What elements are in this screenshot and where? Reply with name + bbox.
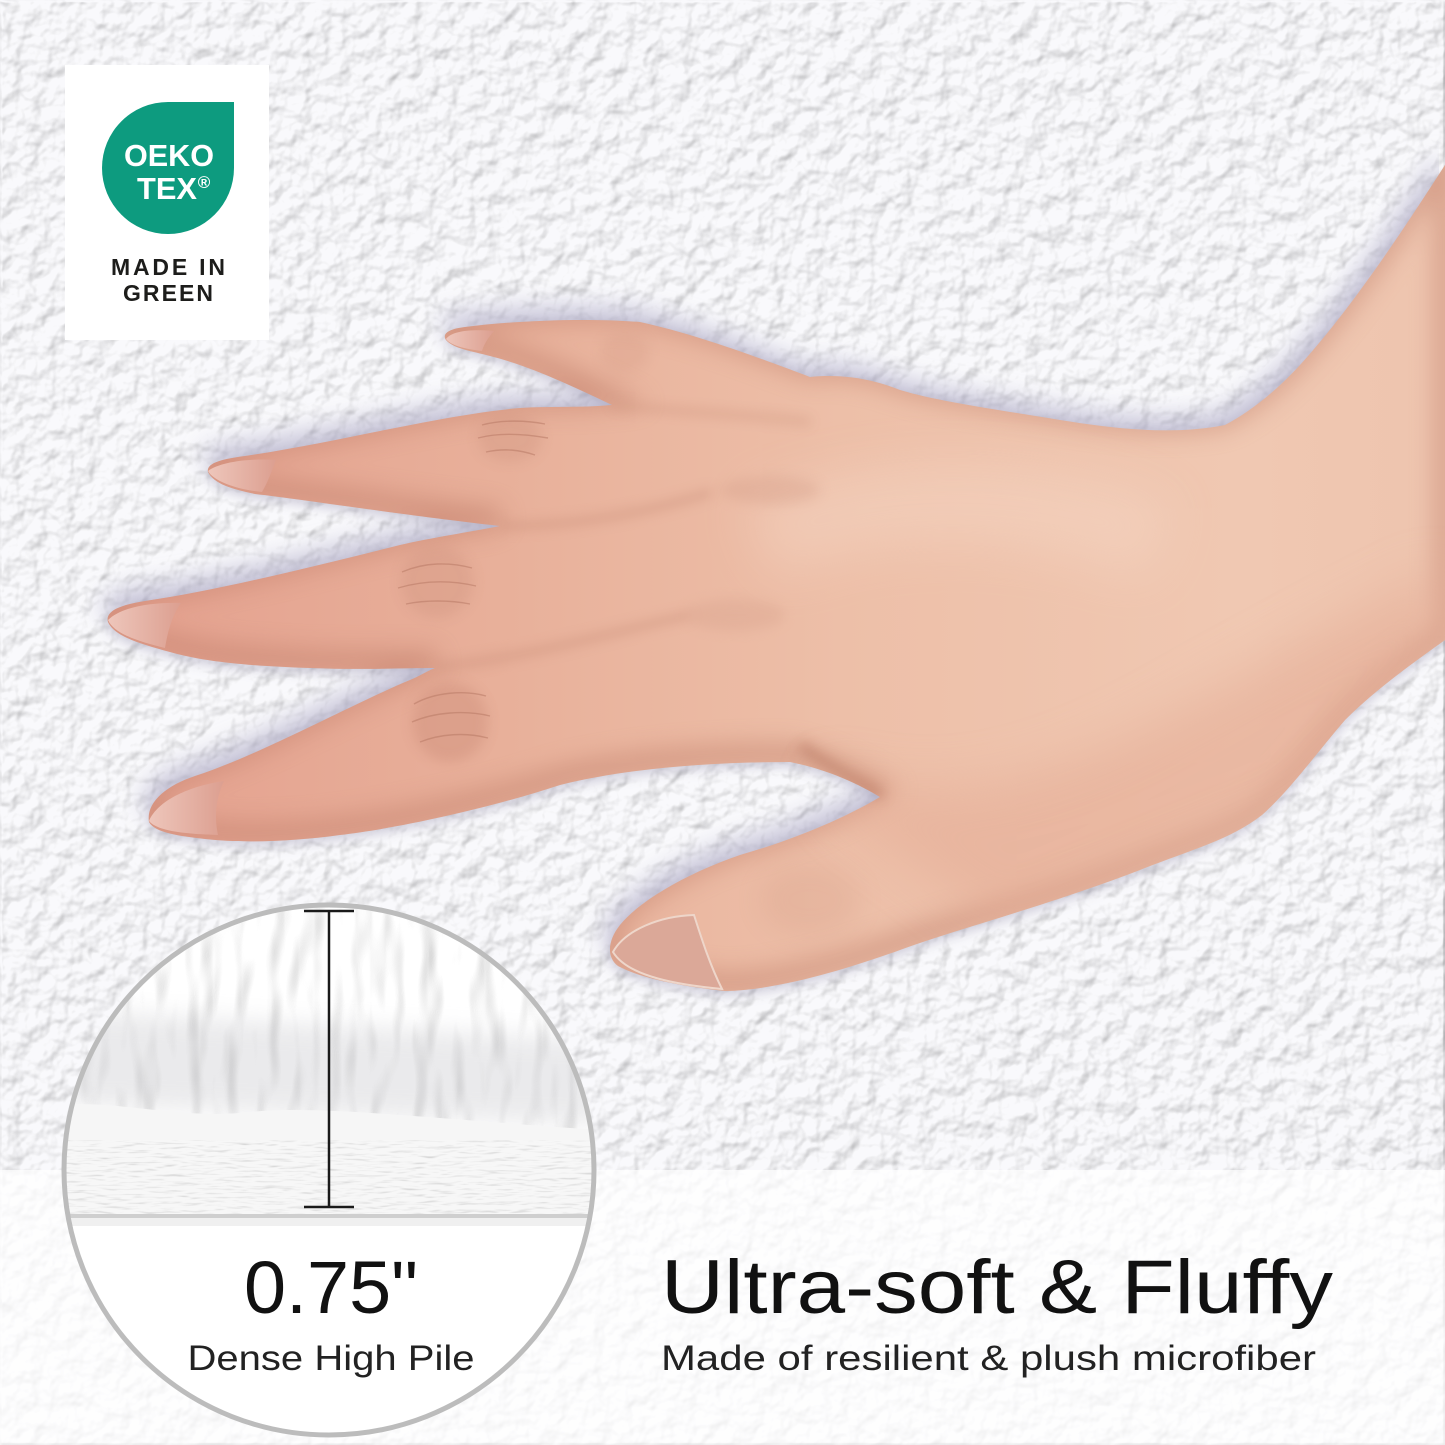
icon: green leaf <box>102 102 234 234</box>
certification badge: OEKO-TEX Made in Green <box>65 65 269 340</box>
pile height caption: Dense High Pile <box>188 1339 474 1378</box>
heading: Ultra-soft & Fluffy <box>661 1245 1333 1330</box>
shadow pressed into the rug around the hand <box>102 151 1445 995</box>
certification badge: OEKO-TEX Made in Green: MADE IN <box>111 254 225 280</box>
circular inset: pile height close-up <box>60 900 600 1441</box>
certification badge: OEKO-TEX Made in Green: TEX <box>137 171 197 206</box>
backing fabric <box>60 1142 600 1215</box>
certification badge: OEKO-TEX Made in Green: GREEN <box>123 280 213 306</box>
certification badge: OEKO-TEX Made in Green: ® <box>198 173 211 192</box>
hand <box>108 157 1445 991</box>
bottom translucent white band <box>0 1170 1445 1445</box>
height measurement bracket <box>304 911 354 1207</box>
certification badge: OEKO-TEX Made in Green: OEKO <box>124 138 214 173</box>
subheading: Made of resilient & plush microfiber <box>661 1339 1316 1378</box>
fur pile close-up <box>82 908 576 1128</box>
fingernails <box>108 330 722 989</box>
fluffy base layer <box>68 1104 576 1140</box>
pile height value: 0.75" <box>244 1246 418 1329</box>
shadow under the fur tufts <box>60 1010 600 1125</box>
